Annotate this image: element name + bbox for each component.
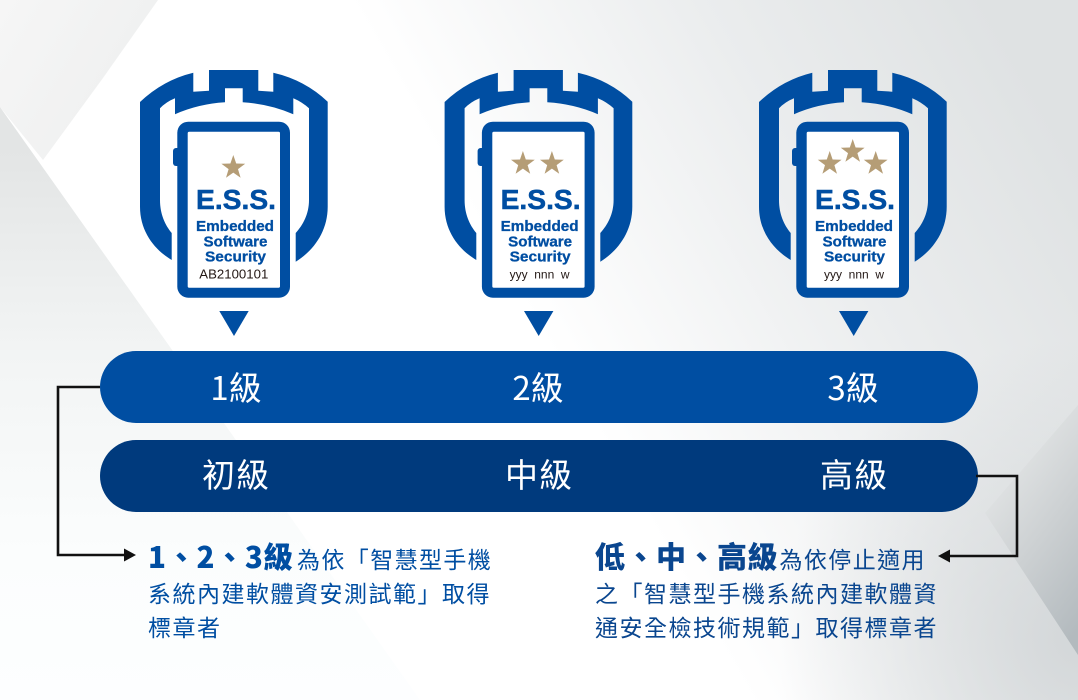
text block: numeric level note: 系統內建軟體資安測試範」取得	[148, 575, 491, 609]
label: Embedded Software Security: Embedded	[196, 219, 274, 235]
label: advanced: 高級	[820, 449, 888, 497]
label: serial format: yyy nnn w	[510, 268, 570, 282]
label: Embedded Software Security: Security	[205, 249, 266, 265]
badge: level 2	[445, 70, 632, 298]
badge: level 1	[140, 70, 328, 298]
text block: named level note: 為依停止適用	[780, 541, 926, 575]
bar: named levels	[100, 440, 978, 512]
icon: one star	[221, 155, 245, 178]
label: E.S.S.: E.S.S.	[501, 184, 581, 215]
arrow: level 1 pointer	[219, 311, 249, 336]
label: E.S.S.: E.S.S.	[815, 184, 895, 215]
label: Embedded Software Security: Security	[510, 249, 571, 265]
label: intermediate: 中級	[505, 449, 573, 497]
text block: numeric level note	[148, 535, 492, 643]
text block: named level note: 低、中、高級	[595, 533, 778, 577]
label: basic: 初級	[202, 449, 270, 497]
text block: named level note: 之「智慧型手機系統內建軟體資	[595, 575, 938, 609]
icon: phone body	[173, 122, 290, 298]
label: serial format: yyy nnn w	[824, 268, 884, 282]
icon: phone body	[792, 122, 909, 298]
label: Embedded Software Security: Embedded	[501, 219, 579, 235]
label: Embedded Software Security	[196, 219, 274, 265]
label: E.S.S.: E.S.S.	[196, 184, 276, 215]
text block: numeric level note: 為依「智慧型手機	[297, 541, 492, 575]
arrow: level 2 pointer	[524, 311, 553, 336]
label: Embedded Software Security: Security	[824, 249, 885, 265]
icon: castle shield	[759, 70, 947, 262]
label: Embedded Software Security: Software	[822, 234, 886, 250]
label: serial number: AB2100101	[199, 268, 268, 282]
icon: three stars	[818, 139, 888, 174]
label: Embedded Software Security	[501, 219, 579, 265]
text block: numeric level note: 標章者	[148, 609, 222, 643]
label: level 2: 2級	[512, 362, 564, 410]
label: level 3: 3級	[827, 362, 879, 410]
label: Embedded Software Security: Embedded	[815, 219, 893, 235]
arrow: level 3 pointer	[839, 311, 868, 336]
label: Embedded Software Security: Software	[508, 234, 572, 250]
text block: named level note: 通安全檢技術規範」取得標章者	[595, 609, 938, 643]
label: level 1: 1級	[210, 362, 262, 410]
label: Embedded Software Security	[815, 219, 893, 265]
text block: named level note	[595, 533, 938, 643]
icon: phone body	[478, 122, 595, 298]
icon: castle shield	[445, 70, 632, 262]
bar: numeric levels	[100, 351, 978, 423]
connector arrow: right	[938, 476, 1017, 562]
badge: level 3	[759, 70, 947, 298]
label: Embedded Software Security: Software	[204, 234, 268, 250]
connector arrow: left	[58, 387, 136, 562]
icon: two stars	[511, 151, 564, 174]
text block: numeric level note: 1、2、3級	[148, 535, 293, 577]
icon: castle shield	[140, 70, 328, 262]
